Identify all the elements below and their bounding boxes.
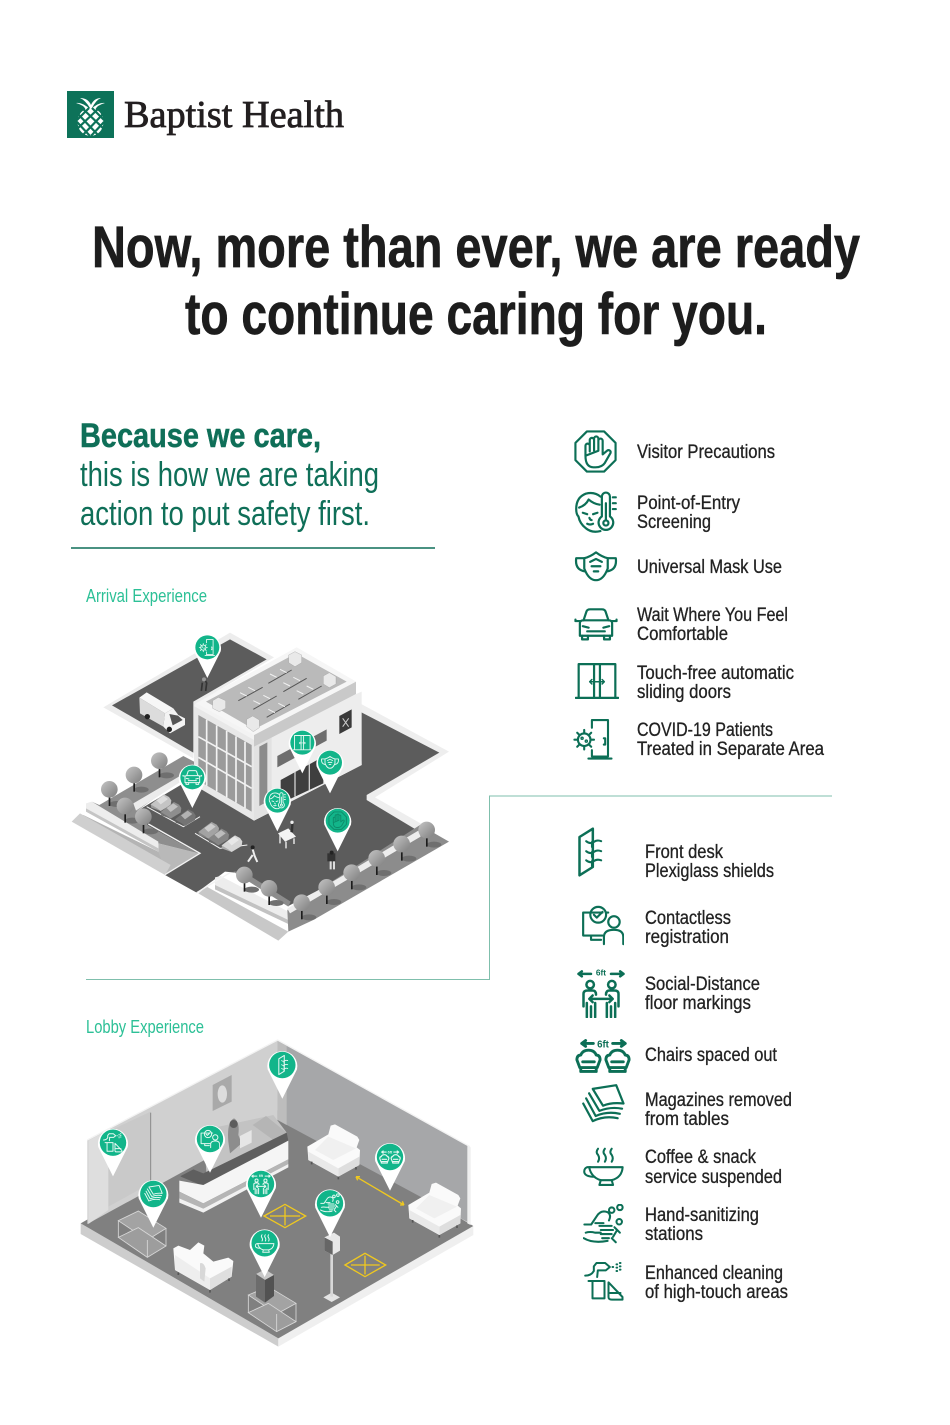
item: sliding doors: Touch-free automatic [637, 663, 794, 684]
item: cleaning: of high-touch areas [645, 1282, 788, 1303]
pin: coffee [250, 1229, 280, 1277]
item: floor markings: Social-Distance [645, 974, 760, 995]
title [92, 215, 860, 347]
item: mask [576, 552, 782, 580]
item: coffee [584, 1147, 782, 1188]
logo wordmark: Baptist Health [124, 94, 344, 136]
item: registration: registration [645, 927, 729, 948]
pin: plexiglass shield [267, 1051, 297, 1099]
item: cleaning: Enhanced cleaning [645, 1263, 783, 1284]
item: magazines: from tables [645, 1109, 729, 1130]
title: to continue caring for you. [185, 282, 767, 347]
pin: cleaning [98, 1129, 128, 1176]
item: covid: Treated in Separate Area [637, 739, 824, 760]
item: shields: Front desk [645, 842, 723, 863]
yellow floor marks [264, 1177, 404, 1277]
item: magazines [583, 1085, 792, 1130]
back parking lot [103, 633, 274, 758]
item: floor markings: floor markings [645, 993, 751, 1014]
wall pineapple sign [213, 1075, 232, 1111]
item: shields: Plexiglass shields [645, 861, 774, 882]
table 2 with coffee machine [248, 1269, 296, 1332]
item: covid [574, 720, 824, 760]
item: screening: Screening [637, 512, 711, 533]
item: shields [580, 829, 774, 882]
legend: lobby items [577, 829, 792, 1303]
pin: sanitizer [315, 1189, 345, 1237]
item: sliding doors [576, 663, 794, 703]
item: sanitizing: stations [645, 1224, 703, 1245]
pin: car [179, 765, 206, 808]
pin: screening [264, 788, 291, 831]
item: cleaning [585, 1263, 788, 1303]
item: sliding doors: sliding doors [637, 682, 731, 703]
table 1 with glass [118, 1211, 166, 1257]
illustration: lobby isometric room [81, 1040, 473, 1347]
subheading: because we care: Because we care, [80, 417, 321, 455]
item: chairs [577, 1039, 778, 1071]
walls [87, 1040, 471, 1225]
item: registration: Contactless [645, 908, 731, 929]
item: registration [583, 907, 731, 948]
table and people [201, 677, 335, 869]
illustration: arrival isometric building [72, 633, 449, 941]
item: floor markings [578, 968, 760, 1017]
pin: covid separate area [194, 635, 221, 678]
item: chairs: Chairs spaced out [645, 1045, 778, 1066]
reception desk [179, 1115, 288, 1213]
subheading: because we care [80, 417, 379, 533]
pin: magazines [138, 1180, 168, 1228]
item: coffee: service suspended [645, 1167, 782, 1188]
heading: lobby experience: Lobby Experience [86, 1016, 204, 1037]
item: coffee: Coffee & snack [645, 1147, 756, 1168]
sanitizer stand [323, 1233, 340, 1302]
pin: mask [316, 750, 344, 793]
building [194, 647, 362, 821]
armchair 2 [408, 1183, 461, 1238]
armchair 1 [307, 1124, 360, 1179]
armchair 3 [173, 1242, 233, 1293]
item: mask: Universal Mask Use [637, 557, 782, 578]
item: wait [575, 605, 788, 645]
icon: pineapple mark [67, 91, 114, 138]
pin: doors [289, 730, 316, 773]
item: wait: Comfortable [637, 624, 728, 645]
pin: hand [324, 808, 351, 851]
pin: registration [195, 1125, 225, 1173]
logo: Baptist Health [67, 91, 344, 138]
floor slab [81, 1110, 473, 1347]
item: wait: Wait Where You Feel [637, 605, 788, 626]
pin: social distance [246, 1170, 276, 1218]
heading: arrival experience: Arrival Experience [86, 585, 207, 606]
pin: chairs [375, 1143, 405, 1191]
item: screening: Point-of-Entry [637, 493, 740, 514]
item: covid: COVID-19 Patients [637, 720, 773, 741]
item: sanitizing [584, 1205, 759, 1245]
item: screening [576, 493, 740, 533]
ground plaza [72, 703, 449, 941]
trees [101, 752, 441, 920]
item: magazines: Magazines removed [645, 1090, 792, 1111]
subheading: because we care: action to put safety first. [80, 495, 370, 533]
item: visitor precautions: Visitor Precautions [637, 442, 775, 463]
parked cars [151, 794, 242, 852]
item: visitor precautions [575, 431, 775, 472]
legend: arrival items [574, 431, 824, 760]
item: sanitizing: Hand-sanitizing [645, 1205, 759, 1226]
ambulance [139, 692, 185, 733]
subheading: because we care: this is how we are taking [80, 456, 379, 494]
